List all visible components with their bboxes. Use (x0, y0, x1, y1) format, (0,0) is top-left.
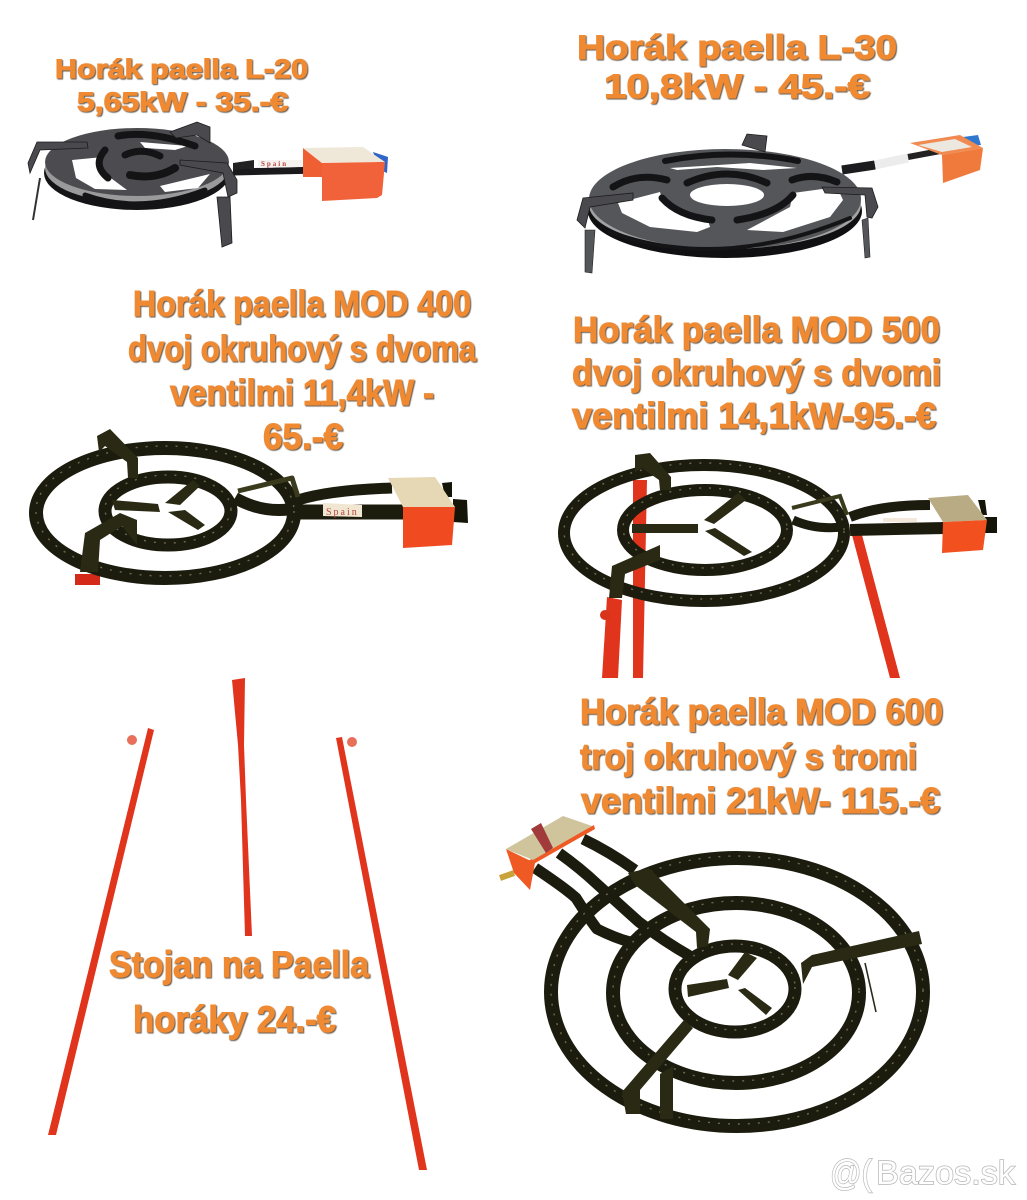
heading: MOD 500: Horák paella MOD 500 (573, 309, 940, 350)
heading: L-20: 5,65kW - 35.-€ (77, 87, 288, 117)
heading: L-20 (55, 54, 308, 117)
heading: MOD 600 (580, 691, 943, 821)
heading: L-30: Horák paella L-30 (577, 29, 897, 67)
heading: MOD 600: troj okruhový s tromi (580, 736, 917, 777)
heading: stand (109, 944, 369, 1040)
heading: stand: Stojan na Paella (109, 944, 369, 985)
burner: L-30 (577, 134, 983, 273)
heading: L-30: 10,8kW - 45.-€ (604, 68, 870, 106)
burner: MOD 400 (36, 429, 468, 585)
heading: MOD 400: Horák paella MOD 400 (133, 283, 471, 324)
heading: MOD 400: dvoj okruhový s dvoma (128, 328, 477, 369)
orange valve box (500, 816, 595, 890)
burner: MOD 400: Spain (326, 507, 359, 518)
heading: L-30 (577, 29, 897, 106)
watermark: Bazos.sk (876, 1154, 1016, 1191)
heading: MOD 600: Horák paella MOD 600 (580, 691, 943, 732)
heading: MOD 600: ventilmi 21kW- 115.-€ (581, 780, 940, 821)
burner: L-20: Spain (261, 160, 288, 168)
watermark (830, 1152, 1016, 1193)
orange valve box (910, 135, 983, 183)
orange valve box (388, 477, 468, 548)
heading: stand: horáky 24.-€ (133, 999, 336, 1040)
heading: MOD 500 (572, 309, 941, 436)
heading: L-20: Horák paella L-20 (55, 54, 308, 84)
burner: MOD 500 (564, 453, 997, 678)
heading: MOD 400: ventilmi 11,4kW - (170, 372, 434, 413)
heading: MOD 500: dvoj okruhový s dvomi (572, 352, 941, 393)
orange valve box (928, 495, 997, 553)
heading: MOD 500: ventilmi 14,1kW-95.-€ (572, 395, 936, 436)
orange valve box (303, 147, 388, 201)
heading: MOD 400: 65.-€ (263, 416, 343, 457)
burner: L-20 (28, 122, 388, 247)
burner: MOD 600 (500, 816, 923, 1126)
stand legs (48, 678, 427, 1170)
watermark: @( (830, 1152, 872, 1193)
heading: MOD 400 (128, 283, 477, 457)
